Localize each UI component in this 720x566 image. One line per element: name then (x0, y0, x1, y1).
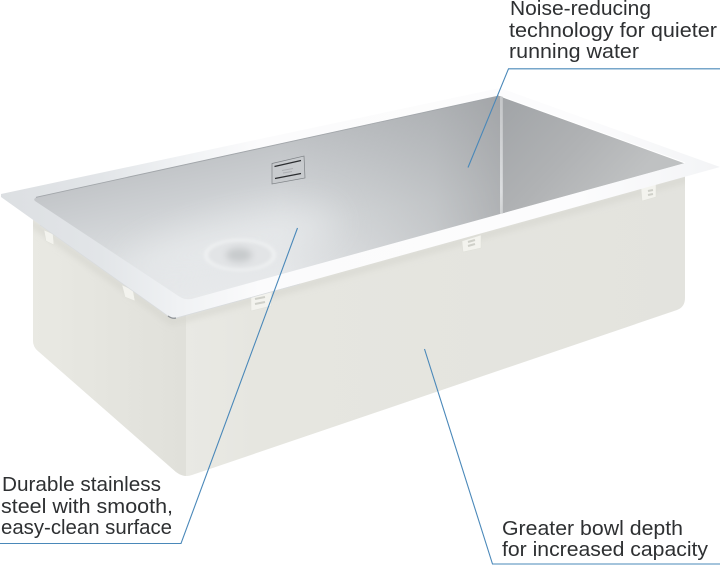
leader line (0, 228, 298, 544)
basin right rim line (503, 97, 685, 163)
flange front edge (40, 225, 300, 318)
callout text: easy-clean surface (1, 517, 172, 539)
overflow plate (272, 156, 305, 184)
callout text: Greater bowl depth (502, 518, 683, 540)
callout text: for increased capacity (502, 539, 709, 561)
basin back rim line (36, 96, 499, 197)
callout: bowl depth (424, 349, 720, 564)
callout text: technology for quieter (509, 20, 717, 42)
basin floor and back wall (34, 96, 566, 299)
callout text: steel with smooth, (1, 496, 173, 518)
mounting clips (44, 183, 656, 311)
callout: stainless steel (0, 228, 298, 544)
bright floor patch (177, 214, 310, 250)
leader line (468, 69, 720, 168)
leader line (424, 349, 720, 564)
wall corner highlight (500, 96, 503, 216)
sink basin (34, 96, 684, 299)
callout text: running water (509, 41, 639, 63)
drain (206, 245, 274, 266)
flange front tip (168, 316, 176, 318)
sink outer body (30, 170, 690, 480)
callout text: Durable stainless (2, 474, 161, 496)
stainless steel flange (1, 88, 720, 318)
sink illustration (1, 88, 720, 480)
right side wall (501, 97, 685, 215)
callout: noise-reducing (468, 0, 720, 168)
